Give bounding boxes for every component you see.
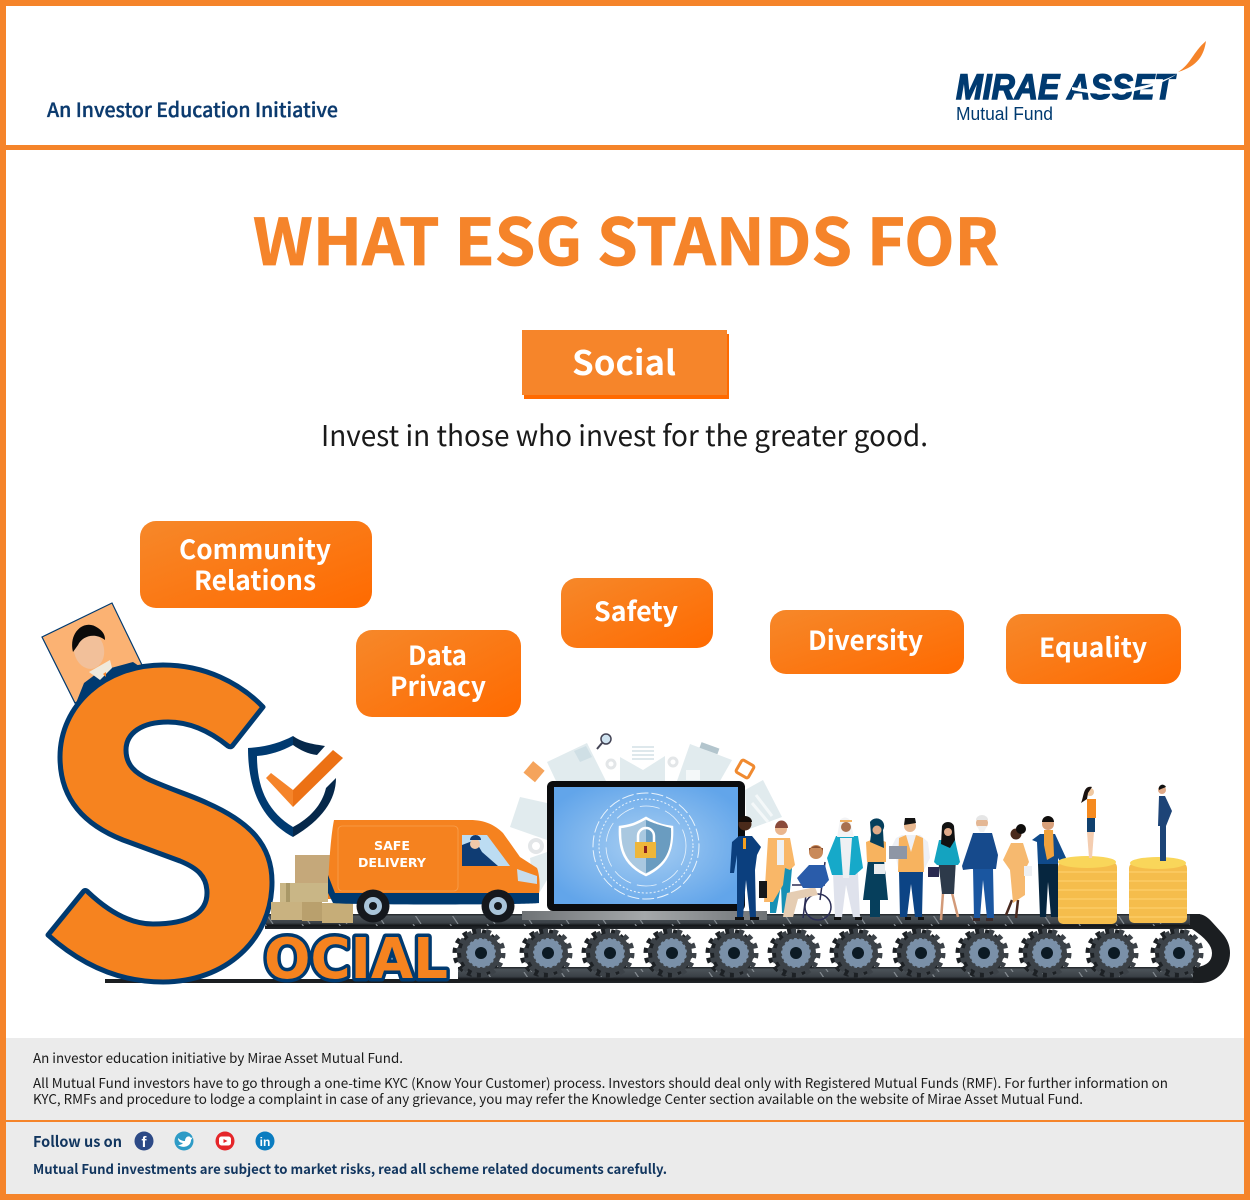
button: Community Relations (140, 521, 372, 608)
subtitle: Invest in those who invest for the greater good. (321, 414, 928, 455)
delivery van: DELIVERY (358, 856, 426, 870)
person: woman in teal blouse (928, 822, 960, 920)
person: man with scarf (1032, 816, 1067, 917)
person: woman in peach dress (1003, 824, 1032, 918)
button: Diversity (770, 610, 964, 674)
conveyor gears (455, 931, 1201, 975)
person: man in navy suit (730, 816, 761, 920)
footer disclaimer text (33, 1048, 1168, 1108)
icon: shield with tick (248, 736, 343, 837)
header tagline: An Investor Education Initiative (47, 94, 338, 123)
footer disclaimer text: KYC, RMFs and procedure to lodge a complaint in case of any grievance, you may refer the Knowledge Center section available on the website of Mirae Asset Mutual Fund. (33, 1089, 1083, 1108)
logo: Mirae Asset Mutual Fund: Mutual Fund (956, 104, 1053, 124)
logo: Mirae Asset Mutual Fund (956, 41, 1206, 124)
button: Equality: Equality (1039, 626, 1147, 665)
button: Diversity: Diversity (808, 619, 923, 658)
icon: facebook (134, 1132, 154, 1151)
word OCIAL: OCIAL (264, 927, 448, 992)
button: Equality (1006, 614, 1181, 684)
big letter S (48, 665, 272, 982)
person: man in teal jacket (827, 818, 863, 920)
title: WHAT ESG STANDS FOR (253, 192, 999, 284)
follow us label: Follow us on (33, 1131, 122, 1152)
header divider (6, 145, 1244, 150)
button: Data Privacy: Data (408, 634, 467, 673)
button: Safety (561, 578, 713, 648)
delivery van (328, 820, 540, 922)
icon: youtube (216, 1132, 234, 1150)
person: woman in yellow coat (759, 821, 795, 913)
person: older man in plaid suit (962, 815, 998, 921)
button: Community Relations: Community (179, 528, 331, 567)
icon: twitter (174, 1132, 194, 1150)
person: man in wheelchair (783, 845, 831, 920)
heading badge: Social: Social (572, 336, 676, 385)
button: Safety: Safety (594, 590, 678, 629)
button: Community Relations: Relations (194, 559, 316, 598)
coin stack with man (1129, 785, 1187, 923)
icon: portrait card (42, 603, 142, 705)
person: man with laptop (889, 818, 930, 920)
button: Data Privacy (356, 630, 521, 717)
icon: facebook: f (142, 1134, 148, 1151)
conveyor belt (105, 914, 1230, 983)
button: Data Privacy: Privacy (390, 665, 486, 704)
icon: linkedin (256, 1132, 274, 1150)
logo: Mirae Asset Mutual Fund: MIRAE ASSET (956, 68, 1176, 107)
footer panel (6, 1038, 1244, 1194)
person: woman in hijab (863, 818, 888, 917)
boxes (271, 855, 353, 923)
icon: linkedin: in (260, 1135, 270, 1149)
footer disclaimer text: An investor education initiative by Mirae Asset Mutual Fund. (33, 1048, 403, 1067)
heading badge: Social (522, 330, 729, 399)
delivery van: SAFE (374, 839, 410, 853)
footer disclaimer text: All Mutual Fund investors have to go through a one-time KYC (Know Your Customer) process. Investors should deal only with Registered Mutual Funds (RMF). For further information on (33, 1073, 1168, 1092)
coin stack with woman (1058, 787, 1117, 924)
illustration: documents behind laptop (510, 734, 782, 900)
risk statement: Mutual Fund investments are subject to market risks, read all scheme related documents carefully. (33, 1158, 667, 1178)
laptop with security shield (522, 781, 767, 920)
